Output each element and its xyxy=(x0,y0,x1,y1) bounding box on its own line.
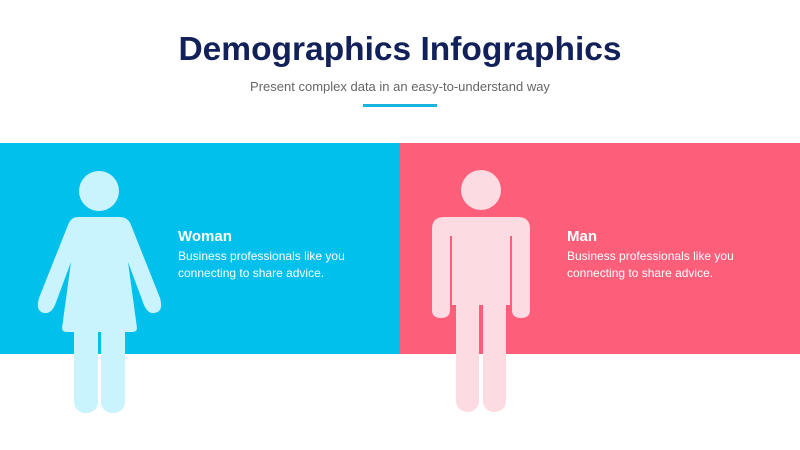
panel: man xyxy=(400,143,800,354)
panel: woman xyxy=(0,143,400,354)
text block: woman: Business professionals like you xyxy=(178,249,345,263)
text block: man: connecting to share advice. xyxy=(567,266,713,280)
icon: woman xyxy=(38,171,162,413)
text block: man xyxy=(567,228,734,280)
text block: woman: Woman xyxy=(178,228,232,245)
text block: woman xyxy=(178,228,345,280)
title: Demographics Infographics xyxy=(178,31,622,68)
text block: man: Business professionals like you xyxy=(567,249,734,263)
icon: man xyxy=(432,170,530,412)
subtitle: Present complex data in an easy-to-understand way xyxy=(250,79,550,94)
text block: woman: connecting to share advice. xyxy=(178,266,324,280)
accent line xyxy=(363,104,437,107)
text block: man: Man xyxy=(567,228,597,245)
